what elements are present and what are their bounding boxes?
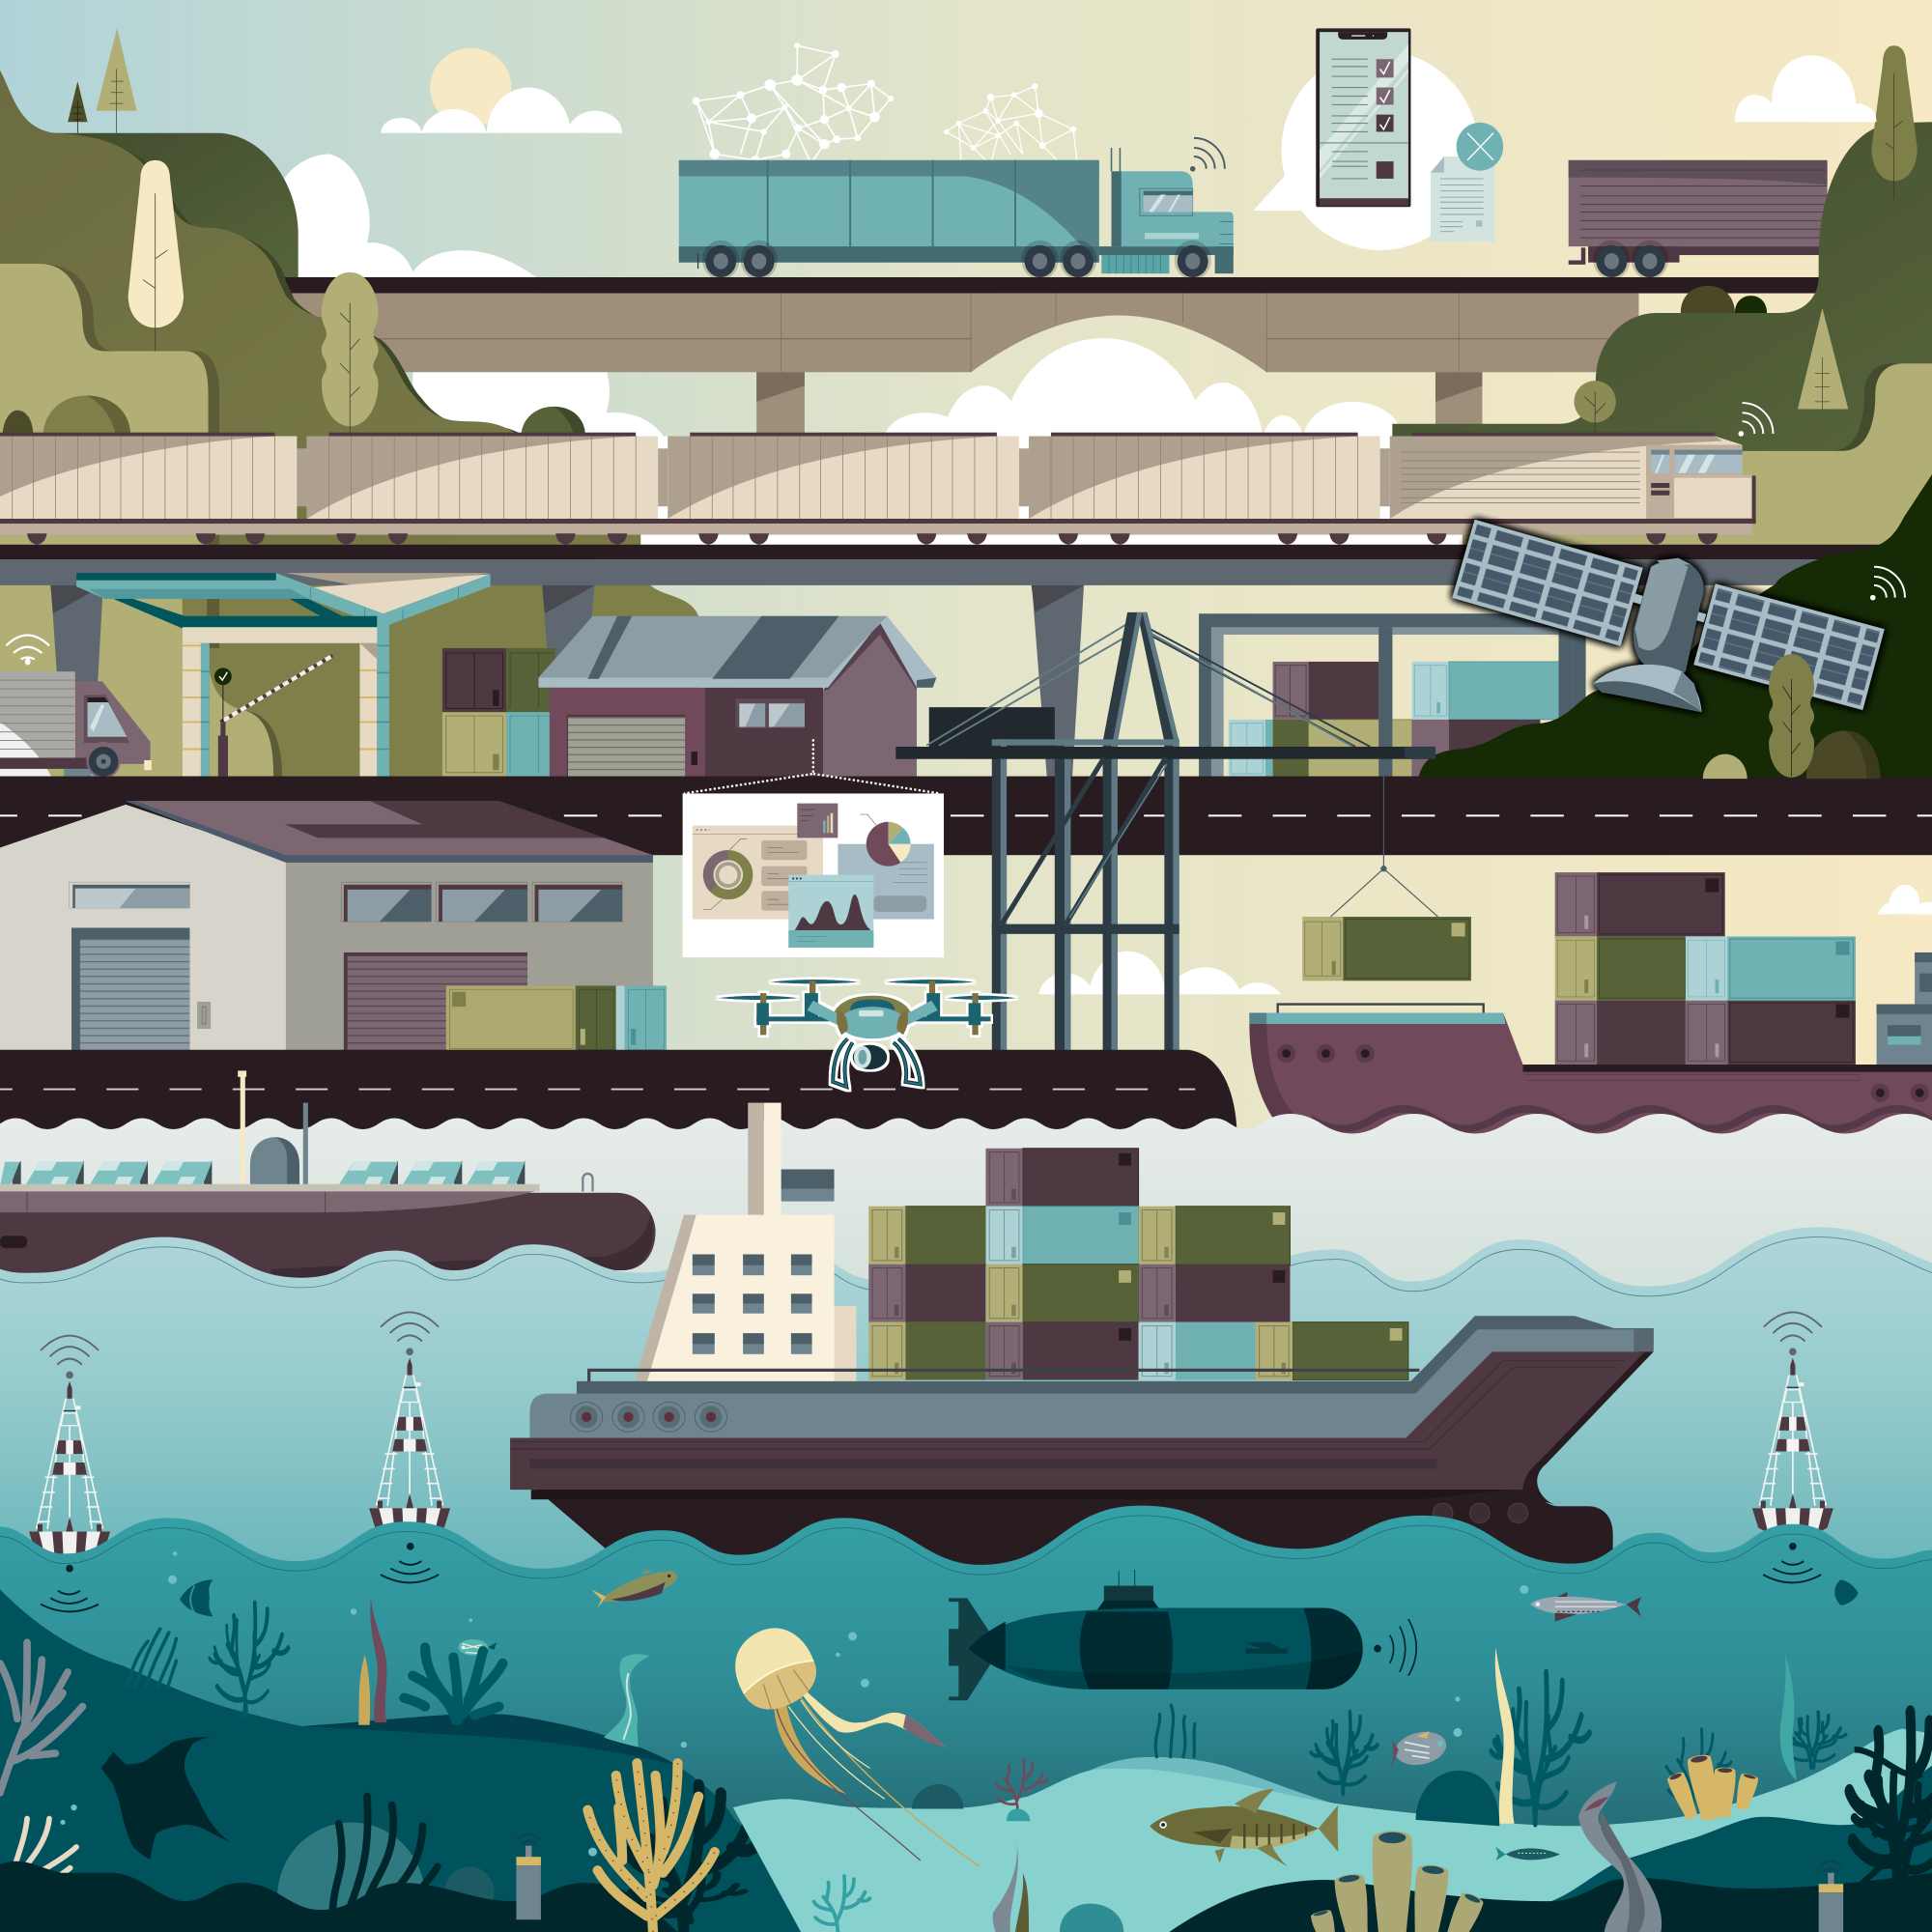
teal kelp right (1780, 1654, 1797, 1780)
left dark seabed hill (0, 1589, 813, 1932)
teal kelp (604, 1654, 649, 1747)
black coral right (1850, 1713, 1932, 1886)
small barge with solar panels (0, 1070, 656, 1306)
cream tree (128, 160, 184, 352)
underwater sonar rings (41, 1543, 1821, 1611)
drone landing legs (833, 1038, 921, 1087)
ship deck portholes (571, 1403, 727, 1432)
hanging cargo container (1302, 759, 1471, 980)
wifi above van (6, 636, 49, 666)
crane cloud (1038, 952, 1282, 994)
triangle tree right (1798, 308, 1848, 451)
far water (0, 1227, 1932, 1602)
small teal fish (1495, 1847, 1560, 1861)
ship cabin (1877, 952, 1932, 1065)
right solar panel (1693, 583, 1885, 710)
cargo ship upper right (1249, 872, 1932, 1152)
right hill bushes (1681, 286, 1767, 313)
ship deck (529, 1316, 1654, 1438)
bow portholes (1433, 1503, 1528, 1523)
boom barrier (218, 656, 332, 777)
round tree right (1574, 381, 1616, 434)
cloud far right (1878, 885, 1932, 914)
tan tube sponge cluster (1310, 1831, 1485, 1932)
sand seabed (733, 1729, 1932, 1932)
analytics panel connector (684, 739, 940, 793)
fish gold left (591, 1570, 677, 1608)
seaweed strands (127, 1629, 176, 1688)
purple trailer truck (1569, 160, 1828, 280)
house with slate roof (538, 616, 936, 779)
blue gray panel (838, 844, 934, 920)
containers at warehouse (446, 985, 667, 1054)
inspection drone (717, 980, 1016, 1087)
far left seabed corals (127, 1598, 502, 1725)
gantry crane (895, 612, 1435, 1054)
satellite (1452, 520, 1885, 712)
left dark back hill (49, 133, 298, 278)
pie chart (860, 814, 911, 867)
train wheels (27, 533, 1718, 545)
sea horizon layer (0, 1114, 1932, 1355)
black coral behind gold coral (629, 1785, 757, 1932)
coral teal center (1311, 1712, 1378, 1794)
small angelfish right (1834, 1579, 1858, 1605)
satellite dish (1593, 665, 1701, 712)
wifi signal on truck (1190, 138, 1225, 172)
buoy center (369, 1312, 450, 1535)
near water (0, 1506, 1932, 1932)
small purple card (797, 804, 838, 838)
sensor right (1819, 1861, 1843, 1932)
buoy left (29, 1336, 110, 1559)
bushy coral (404, 1647, 502, 1720)
cloud near sun (381, 88, 622, 133)
bubbles (60, 1551, 1528, 1857)
small pine trees (68, 28, 137, 133)
branching corals behind sand right (1155, 1673, 1846, 1826)
round striped fish (1391, 1727, 1449, 1770)
background warehouse frame (1199, 613, 1586, 779)
teal semi truck (679, 148, 1234, 280)
ship railing (589, 1370, 1419, 1382)
left foreground dark mound (0, 1861, 678, 1932)
smartphone checklist (1316, 28, 1410, 207)
cream coral bottom left (0, 1819, 76, 1932)
sonar from submarine (1374, 1619, 1416, 1676)
mound behind kelp (1416, 1771, 1499, 1826)
cloud behind left hill (277, 154, 536, 296)
delivery van (0, 671, 152, 782)
left solar panel (1452, 520, 1643, 646)
left hills (0, 71, 640, 552)
lower bridge piers (50, 579, 1084, 782)
small striped fish (458, 1639, 497, 1656)
dark hill under satellite (1418, 474, 1932, 779)
teal mounds on sand (912, 1784, 1123, 1932)
ship lower dark hull (531, 1485, 1613, 1589)
network and app speech bubble (1253, 50, 1479, 250)
tube sponges gold (1666, 1753, 1759, 1822)
drone camera (853, 1045, 887, 1069)
coral teal far right (1666, 1712, 1846, 1811)
barge dome (250, 1137, 299, 1189)
lobed tree in front of satellite (1769, 654, 1814, 778)
seabed mound with seaweed (277, 1797, 494, 1932)
document with close badge (1431, 123, 1503, 242)
stacked containers in warehouse (1229, 662, 1584, 779)
large olive tuna (1150, 1789, 1338, 1866)
toll station canopy (76, 573, 491, 777)
seaweed strands center (1155, 1704, 1195, 1758)
right light olive hill (1452, 363, 1932, 549)
deck containers (1555, 872, 1856, 1065)
right dark hill (1392, 122, 1932, 456)
warehouse roller doors (71, 927, 527, 1054)
wagon 1 (0, 433, 297, 519)
barge hull (0, 1193, 656, 1293)
cream kelp (1495, 1647, 1515, 1824)
maroon kelp (370, 1598, 387, 1722)
olive tree right (1872, 45, 1918, 200)
satellite body (1634, 561, 1704, 676)
analytics dashboard panel (683, 793, 944, 957)
network mesh small (945, 84, 1077, 160)
gray coral left (0, 1642, 82, 1793)
maroon mini coral (996, 1759, 1047, 1821)
angelfish dark left (180, 1579, 213, 1616)
third road (0, 1050, 1237, 1140)
gray kelp center bottom (993, 1841, 1029, 1932)
submarine (949, 1570, 1363, 1700)
cloud under bridge arch (653, 338, 1466, 547)
cloud right top (1735, 55, 1877, 122)
gray kelp right (1578, 1781, 1662, 1932)
drone rotors (717, 980, 1016, 1000)
area chart card (788, 875, 873, 948)
sky background (0, 0, 1932, 1140)
ship container stack (868, 1149, 1408, 1380)
ship waterline shade (1311, 1109, 1932, 1128)
checkpoint approval icon (214, 668, 232, 685)
solar panels on barge (0, 1161, 525, 1186)
ship funnel (748, 1103, 835, 1220)
ship hull (1249, 1012, 1932, 1152)
container ship (510, 1103, 1654, 1589)
sun (430, 48, 511, 127)
gold coral (587, 1763, 715, 1932)
ship superstructure (635, 1215, 856, 1382)
network mesh large (693, 43, 893, 164)
jellyfish (723, 1616, 980, 1866)
wagon 3 (668, 433, 1019, 519)
manta ray (101, 1737, 231, 1860)
containers beside house (442, 648, 555, 777)
cloud under bridge left (412, 370, 668, 549)
upper road deck (278, 277, 1880, 294)
small teal coral on sand (813, 1876, 870, 1932)
gold kelp (358, 1655, 370, 1725)
second road (0, 777, 1932, 855)
hill bushes under satellite (1703, 730, 1880, 779)
warehouse roof (126, 801, 653, 863)
coral teal right large (1491, 1673, 1589, 1824)
warehouse windows (69, 882, 622, 922)
portholes (1277, 1044, 1929, 1102)
fish silver right (1530, 1592, 1641, 1622)
wagon 2 (307, 433, 658, 519)
freight train (0, 433, 1756, 545)
right seabed layers (1169, 1766, 1932, 1932)
wagon 4 (1029, 433, 1380, 519)
locomotive (1390, 433, 1756, 524)
sage lobed tree (322, 272, 379, 434)
lower bridge deck (0, 545, 1932, 585)
sensor left (516, 1834, 541, 1919)
upper bridge (278, 294, 1638, 437)
wifi on right hill (1738, 403, 1773, 437)
beige donut panel (693, 826, 823, 920)
wifi near satellite (1870, 567, 1905, 600)
branch coral dark teal (210, 1603, 288, 1716)
bushes left (3, 395, 585, 437)
warehouse (0, 801, 667, 1054)
mid level hills (0, 579, 699, 782)
buoy right (1752, 1312, 1833, 1535)
ship maroon hull (1506, 1351, 1654, 1506)
